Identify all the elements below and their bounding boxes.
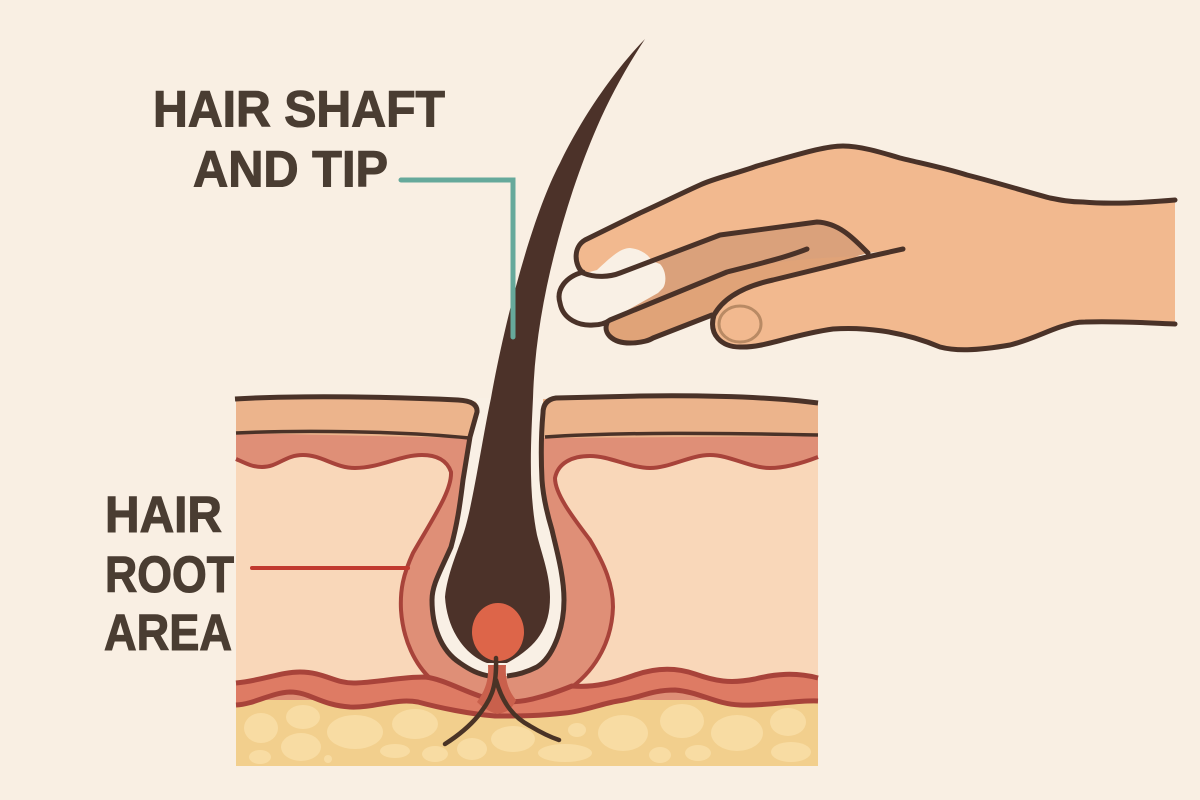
root stalk bbox=[477, 665, 516, 714]
basal skin band bbox=[236, 669, 818, 716]
epidermis boundary lines bbox=[236, 431, 818, 438]
follicle outlines bbox=[235, 396, 818, 676]
dermis base bbox=[236, 430, 818, 700]
lower ring finger shade bbox=[607, 256, 866, 342]
hair shaft bbox=[445, 39, 645, 663]
hair papilla bbox=[472, 603, 524, 661]
epidermis bbox=[236, 396, 818, 438]
label: hair root area: AREA bbox=[104, 604, 232, 661]
fat layer bbox=[236, 695, 818, 766]
hand bbox=[559, 146, 1175, 350]
left pale outline bbox=[236, 455, 451, 680]
palm and index finger bbox=[576, 146, 1175, 350]
label: hair root area: ROOT bbox=[105, 546, 234, 603]
label: hair root area bbox=[104, 486, 234, 661]
label: hair root area: HAIR bbox=[105, 486, 222, 543]
label: hair shaft and tip: HAIR SHAFT bbox=[153, 80, 445, 138]
thumb nail bbox=[719, 306, 761, 342]
left pale dermis bbox=[236, 455, 451, 686]
label: hair shaft and tip: AND TIP bbox=[193, 140, 388, 198]
label: hair shaft and tip bbox=[153, 80, 445, 198]
nerve fibres bbox=[445, 658, 559, 744]
skin cross-section bbox=[235, 396, 818, 766]
darker middle and ring fingers bbox=[605, 222, 868, 342]
follicle white sheath bbox=[432, 398, 563, 676]
hand outlines bbox=[559, 146, 1175, 350]
band outlines bbox=[236, 669, 818, 716]
right pale dermis bbox=[555, 455, 818, 687]
leader line: hair shaft and tip bbox=[401, 180, 513, 337]
right pale outline bbox=[555, 455, 818, 687]
fingernail highlight bbox=[560, 248, 665, 324]
leader line: hair root area bbox=[252, 566, 408, 570]
